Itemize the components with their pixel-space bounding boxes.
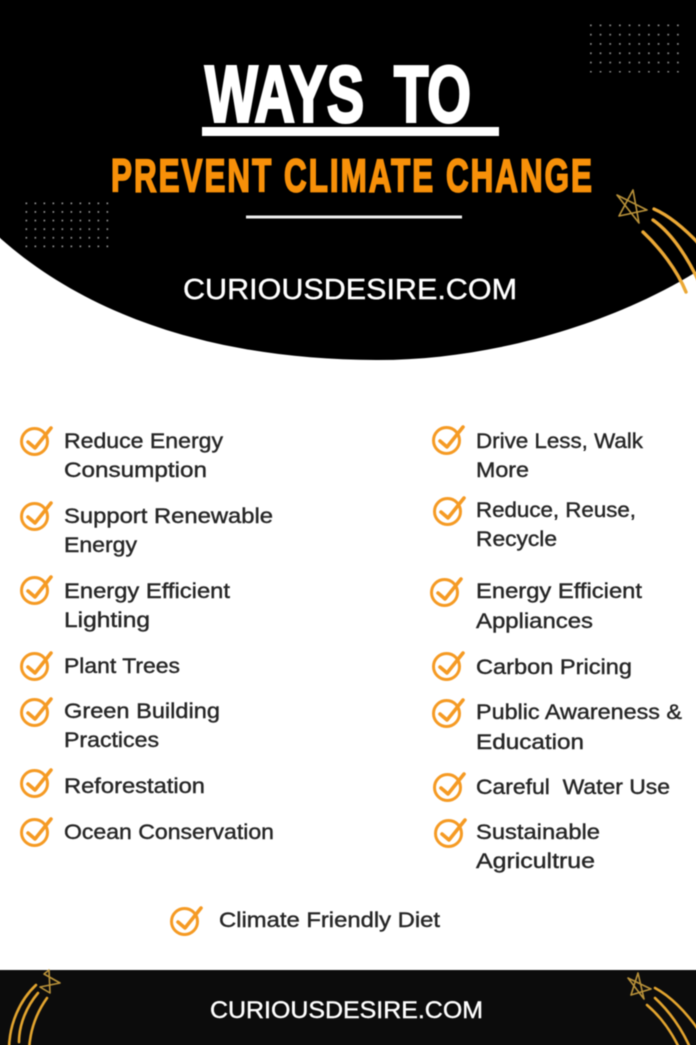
check icon 2 xyxy=(22,503,51,530)
item: sustainable agriculture: Agricultrue xyxy=(476,850,595,873)
item: drive less walk more xyxy=(476,430,644,482)
item: green building practices: Practices xyxy=(64,729,159,752)
check icon 1 xyxy=(22,428,51,454)
item: climate friendly diet: Climate Friendly Diet xyxy=(219,909,440,932)
checklist right column xyxy=(432,427,682,873)
item: reduce reuse recycle xyxy=(476,499,636,551)
item: sustainable agriculture: Sustainable xyxy=(476,821,600,844)
item: energy efficient lighting: Lighting xyxy=(64,609,150,632)
check icon 12 xyxy=(434,700,463,726)
item: ocean conservation: Ocean Conservation xyxy=(64,821,274,844)
item: drive less walk more: Drive Less, Walk xyxy=(476,430,644,453)
checklist left column xyxy=(22,428,274,846)
shooting star footer left xyxy=(9,970,60,1045)
item: public awareness and education xyxy=(476,701,682,754)
divider line xyxy=(246,216,462,218)
item: energy efficient lighting xyxy=(64,580,230,632)
item: carbon pricing: Carbon Pricing xyxy=(476,656,632,679)
title: ways to: WAYS xyxy=(205,50,364,138)
item: reduce energy consumption: Consumption xyxy=(64,459,207,482)
check icon 7 xyxy=(22,819,51,846)
check icon 14 xyxy=(436,820,465,846)
check icon 9 xyxy=(434,498,464,524)
item: support renewable energy: Energy xyxy=(64,534,138,557)
item: energy efficient appliances: Appliances xyxy=(476,610,593,633)
check icon 5 xyxy=(22,699,51,726)
title underline xyxy=(202,127,499,136)
header website url: CURIOUSDESIRE.COM xyxy=(183,274,517,306)
item: energy efficient appliances: Energy Efficient xyxy=(476,580,642,603)
footer website url: CURIOUSDESIRE.COM xyxy=(210,997,483,1024)
item: support renewable energy xyxy=(64,505,273,557)
check icon 13 xyxy=(434,774,464,800)
item: energy efficient appliances xyxy=(476,580,642,633)
shooting star header xyxy=(617,190,696,292)
check icon 6 xyxy=(22,770,51,796)
header black curved panel xyxy=(0,0,696,360)
item: reduce energy consumption xyxy=(64,430,224,482)
centered checklist item xyxy=(172,908,440,934)
check icon 3 xyxy=(22,577,51,604)
check icon 10 xyxy=(432,579,461,606)
item: green building practices xyxy=(64,700,220,752)
check icon 11 xyxy=(434,653,463,680)
item: public awareness and education: Public Awareness & xyxy=(476,701,682,724)
item: green building practices: Green Building xyxy=(64,700,220,723)
check icon 8 xyxy=(434,427,463,454)
check icon 15 xyxy=(172,908,201,934)
shooting star footer right xyxy=(628,973,696,1045)
dot grid top right xyxy=(590,24,679,72)
dot grid left xyxy=(26,202,108,248)
item: reduce reuse recycle: Recycle xyxy=(476,528,557,551)
item: reduce reuse recycle: Reduce, Reuse, xyxy=(476,499,636,522)
item: sustainable agriculture xyxy=(476,821,600,873)
item: energy efficient lighting: Energy Efficient xyxy=(64,580,230,603)
item: public awareness and education: Education xyxy=(476,731,584,754)
item: drive less walk more: More xyxy=(476,459,529,482)
footer band xyxy=(0,970,696,1045)
item: plant trees: Plant Trees xyxy=(64,655,180,678)
item: reforestation: Reforestation xyxy=(64,775,205,798)
title: ways to: TO xyxy=(394,50,471,138)
item: careful water use: Careful Water Use xyxy=(476,776,670,799)
check icon 4 xyxy=(22,653,51,680)
item: support renewable energy: Support Renewable xyxy=(64,505,273,528)
item: reduce energy consumption: Reduce Energy xyxy=(64,430,224,453)
